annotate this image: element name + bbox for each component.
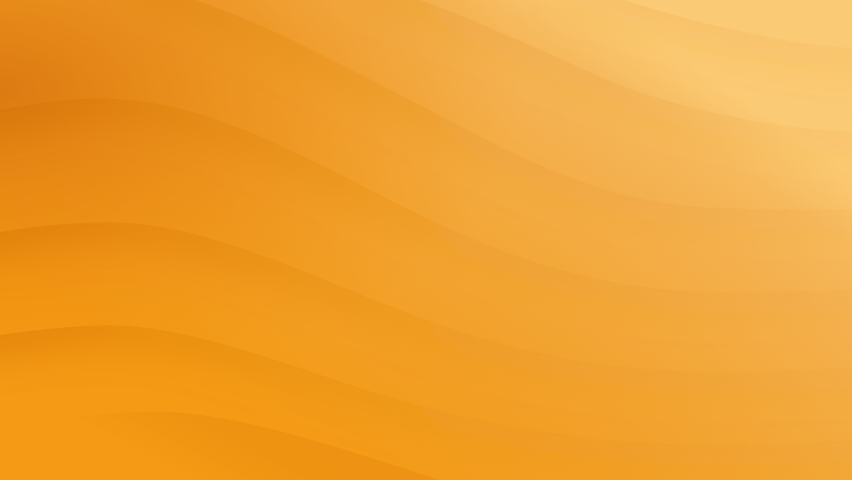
wave edge 3 top right — [565, 0, 852, 52]
wave edge 5 lower middle — [0, 222, 106, 250]
wave edge 1 upper — [170, 0, 456, 142]
wave edge 4 middle — [310, 160, 441, 236]
wave edge 6 lower — [0, 326, 205, 358]
wave edge 7 bottom — [0, 412, 440, 480]
wave edge 2 upper — [360, 0, 852, 136]
